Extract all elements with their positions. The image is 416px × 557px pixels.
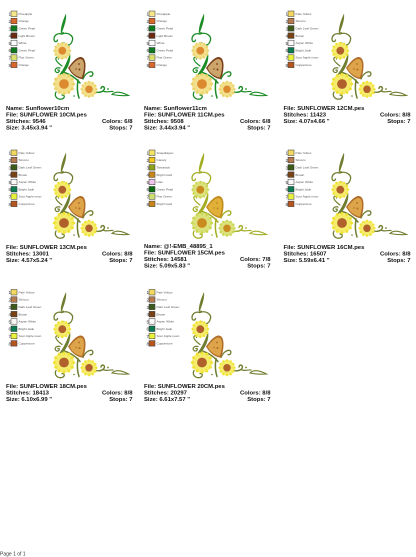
thread colour list: Tamarack <box>156 166 170 170</box>
thread colour list: 4 <box>146 312 150 317</box>
thread colour list: Pale Yellow <box>296 151 312 155</box>
design details: Name: Sunflower11cm <box>144 106 207 112</box>
thread colour list: Bright Jade <box>18 327 34 331</box>
thread colour list: 3 <box>146 305 150 310</box>
thread colour list: Orange <box>18 63 29 67</box>
thread colour list: 1 <box>286 12 288 17</box>
sunflower and butterfly motif <box>331 152 406 238</box>
thread colour list: Coppertone <box>18 202 35 206</box>
thread colour list: 4 <box>286 34 288 39</box>
thread colour list: 8 <box>8 341 12 346</box>
thread colour list: 5 <box>8 319 12 324</box>
thread colour list <box>286 150 319 207</box>
thread colour list <box>146 290 180 346</box>
thread colour list: Aspen White <box>296 41 313 45</box>
thread colour list: Bright Jade <box>18 187 34 191</box>
thread colour list: 4 <box>8 173 12 178</box>
thread colour list: 2 <box>286 158 288 163</box>
design details: Size: 3.45x3.94 " <box>6 126 52 132</box>
thread colour list: 3 <box>146 165 150 170</box>
thread colour list: 4 <box>8 312 12 317</box>
design details: File: SUNFLOWER 15CM.pes <box>144 250 226 256</box>
thread colour list: Green Pearl <box>156 48 173 52</box>
thread colour list: Aspen White <box>18 180 36 184</box>
thread colour list: 6 <box>8 327 12 332</box>
design card: Sunflower10cm <box>6 11 133 132</box>
thread colour list: 4 <box>146 173 150 178</box>
thread colour list: Green Pearl <box>18 48 35 52</box>
thread colour list <box>146 11 173 68</box>
thread colour list: Sour Apple neon <box>296 195 319 199</box>
design details: File: SUNFLOWER 16CM.pes <box>284 245 365 251</box>
design details <box>284 106 411 125</box>
design details <box>284 245 411 264</box>
thread colour list: 6 <box>8 187 12 192</box>
design details: Stitches: 13001 <box>6 252 50 258</box>
thread colour list: Dark Leaf Green <box>296 26 319 30</box>
thread colour list: 5 <box>146 41 150 46</box>
thread colour list: 8 <box>8 63 12 68</box>
design details: Stops: 7 <box>109 397 133 403</box>
thread colour list: 6 <box>146 327 150 332</box>
thread colour list: Flax Green <box>156 56 172 60</box>
design details: Stops: 7 <box>387 258 411 264</box>
design details: Stops: 7 <box>109 126 133 132</box>
thread colour list: Dark Leaf Green <box>18 305 42 309</box>
thread colour list: Sour Apple neon <box>156 334 180 338</box>
thread colour list: Sirocco <box>18 298 29 302</box>
thread colour list: 7 <box>146 194 150 200</box>
thread colour list: Pale Yellow <box>296 12 312 16</box>
design card: Sunflower11cm <box>144 11 271 132</box>
thread colour list: Canary <box>156 158 167 162</box>
thread colour list: 1 <box>146 290 150 295</box>
design details: Colors: 7/8 <box>240 257 271 263</box>
design details: Size: 5.09x5.83 " <box>144 264 190 270</box>
thread colour list <box>146 150 174 207</box>
thread colour list: 7 <box>146 334 150 339</box>
thread colour list: Bright Gold <box>156 202 172 206</box>
design details <box>144 384 271 403</box>
design details: Name: @!-EMB_48895_1 <box>144 244 213 250</box>
thread colour list: 1 <box>8 151 12 156</box>
design card: SUNFLOWER 16CM <box>284 150 411 264</box>
design details: Colors: 6/8 <box>240 119 271 125</box>
thread colour list: 2 <box>286 19 288 24</box>
thread colour list: 1 <box>8 12 12 17</box>
design details: Stops: 7 <box>109 258 133 264</box>
thread colour list: 2 <box>146 298 150 302</box>
thread colour list <box>8 11 35 68</box>
thread colour list: 5 <box>8 41 12 46</box>
sunflower and butterfly motif <box>53 292 128 378</box>
thread colour list: Snapdragon <box>156 151 174 155</box>
design details: File: SUNFLOWER 20CM.pes <box>144 384 226 390</box>
sunflower and butterfly motif <box>191 152 266 238</box>
design card: SUNFLOWER 13CM <box>6 150 133 264</box>
design details: Colors: 8/8 <box>380 252 411 258</box>
design card: @!-EMB_48895_1 <box>144 150 271 270</box>
design details: Stops: 7 <box>247 126 271 132</box>
thread colour list: Pale Yellow <box>156 290 173 294</box>
design card: SUNFLOWER 20CM <box>144 290 271 403</box>
thread colour list <box>286 11 319 68</box>
thread colour list: Aspen White <box>156 320 174 324</box>
thread colour list: 1 <box>286 151 288 156</box>
thread colour list: Brown <box>18 312 28 316</box>
design details: Colors: 6/8 <box>102 119 133 125</box>
design details: Stitches: 9508 <box>144 119 184 125</box>
thread colour list: White <box>18 41 27 45</box>
thread colour list: Pale Yellow <box>18 290 35 294</box>
thread colour list: Bright Gold <box>156 173 172 177</box>
thread colour list: 5 <box>146 180 150 185</box>
thread colour list: White <box>156 41 165 45</box>
design details: Colors: 8/8 <box>240 390 271 396</box>
thread colour list: 6 <box>146 187 150 192</box>
thread colour list: Flax Green <box>18 56 34 60</box>
thread colour list: Green Pearl <box>156 187 173 191</box>
thread colour list: Dark Leaf Green <box>296 166 319 170</box>
thread colour list: Green Pearl <box>156 26 173 30</box>
thread colour list: 7 <box>146 56 150 60</box>
thread colour list: Pineapple <box>156 12 171 16</box>
thread colour list: 3 <box>286 165 288 170</box>
thread colour list: Sirocco <box>156 298 167 302</box>
thread colour list: 2 <box>8 158 12 163</box>
sunflower and butterfly motif <box>53 152 128 238</box>
thread colour list: Coppertone <box>296 202 312 206</box>
thread colour list: Aspen White <box>296 180 313 184</box>
thread colour list: 4 <box>146 34 150 39</box>
sunflower and butterfly motif <box>191 292 266 378</box>
thread colour list: 3 <box>286 26 288 31</box>
thread colour list: 2 <box>146 158 150 163</box>
design details: Size: 5.59x6.41 " <box>284 258 330 264</box>
thread colour list: Brown <box>156 312 166 316</box>
thread colour list: 8 <box>146 341 150 346</box>
thread colour list: 2 <box>8 19 12 24</box>
thread colour list: 8 <box>8 202 12 207</box>
thread colour list: Sirocco <box>296 158 306 162</box>
thread colour list: 7 <box>286 56 288 60</box>
thread colour list: Orange <box>18 19 29 23</box>
thread colour list: Green Pearl <box>18 26 35 30</box>
thread colour list: Light Brown <box>156 34 173 38</box>
design details: Stops: 7 <box>247 397 271 403</box>
design card: SUNFLOWER 18CM <box>6 290 133 403</box>
thread colour list: Orange <box>156 63 167 67</box>
thread colour list: Lilac <box>156 180 163 184</box>
design details: Stitches: 18413 <box>6 390 50 396</box>
design details: File: SUNFLOWER 18CM.pes <box>6 384 88 390</box>
thread colour list: 8 <box>146 63 150 68</box>
design details: Size: 6.61x7.57 " <box>144 397 190 403</box>
design details: Colors: 8/8 <box>102 252 133 258</box>
thread colour list: Bright Jade <box>296 48 311 52</box>
design details: File: SUNFLOWER 11CM.pes <box>144 112 225 118</box>
design details: Size: 6.10x6.99 " <box>6 397 52 403</box>
design details: Colors: 8/8 <box>380 112 411 118</box>
design details <box>6 384 133 403</box>
design details: File: SUNFLOWER 12CM.pes <box>284 106 365 112</box>
design details <box>6 106 133 132</box>
thread colour list: Brown <box>296 34 305 38</box>
thread colour list: Sour Apple neon <box>296 56 319 60</box>
design details: Stitches: 20297 <box>144 390 188 396</box>
design details <box>144 106 271 132</box>
thread colour list: Sirocco <box>296 19 306 23</box>
design details: Stitches: 16507 <box>284 252 327 258</box>
thread colour list: 1 <box>8 290 12 295</box>
thread colour list: 6 <box>286 187 288 192</box>
design details: Colors: 8/8 <box>102 390 133 396</box>
thread colour list: Sour Apple neon <box>18 334 42 338</box>
thread colour list: Coppertone <box>156 342 173 346</box>
thread colour list: 5 <box>286 41 288 46</box>
sunflower and butterfly motif <box>331 14 406 99</box>
thread colour list: Coppertone <box>18 342 35 346</box>
thread colour list: 7 <box>8 56 12 60</box>
thread colour list: 5 <box>286 180 288 185</box>
thread colour list: Brown <box>18 173 28 177</box>
design details: File: SUNFLOWER 13CM.pes <box>6 245 88 251</box>
design details: Size: 3.44x3.94 " <box>144 126 190 132</box>
thread colour list: Dark Leaf Green <box>156 305 180 309</box>
thread colour list: 3 <box>8 305 12 310</box>
thread colour list: Dark Leaf Green <box>18 166 42 170</box>
thread colour list: 6 <box>8 48 12 53</box>
design details <box>144 244 271 270</box>
thread colour list: 1 <box>146 12 150 17</box>
thread colour list: 2 <box>146 19 150 24</box>
design details: Stitches: 14581 <box>144 257 188 263</box>
design details: Stops: 7 <box>387 119 411 125</box>
thread colour list <box>8 150 42 207</box>
thread colour list: Light Brown <box>18 34 35 38</box>
design details <box>6 245 133 264</box>
thread colour list: 4 <box>286 173 288 178</box>
thread colour list: 6 <box>286 48 288 53</box>
design details: Size: 4.07x4.66 " <box>284 119 330 125</box>
design card: SUNFLOWER 12CM <box>284 11 411 125</box>
thread colour list: Pineapple <box>18 12 33 16</box>
thread colour list: Coppertone <box>296 63 312 67</box>
thread colour list: Bright Jade <box>296 187 311 191</box>
design details: Size: 4.57x5.24 " <box>6 258 52 264</box>
thread colour list: Flax Green <box>156 195 172 199</box>
design details: Name: Sunflower10cm <box>6 106 69 112</box>
thread colour list: 4 <box>8 34 12 39</box>
design details: File: SUNFLOWER 10CM.pes <box>6 112 88 118</box>
thread colour list: Sirocco <box>18 158 29 162</box>
thread colour list: Sour Apple neon <box>18 195 42 199</box>
thread colour list: 8 <box>146 202 150 207</box>
design details: Stitches: 11423 <box>284 112 327 118</box>
thread colour list: 5 <box>146 319 150 324</box>
thread colour list: 6 <box>146 48 150 53</box>
thread colour list: Pale Yellow <box>18 151 35 155</box>
thread colour list: 2 <box>8 298 12 302</box>
design details: Stops: 7 <box>247 264 271 270</box>
thread colour list: 1 <box>146 151 150 156</box>
sunflower and butterfly motif <box>53 14 128 99</box>
thread colour list: 7 <box>286 194 288 200</box>
thread colour list: Aspen White <box>18 320 36 324</box>
thread colour list <box>8 290 42 346</box>
thread colour list: Orange <box>156 19 167 23</box>
design details: Stitches: 9546 <box>6 119 46 125</box>
thread colour list: 7 <box>8 334 12 339</box>
thread colour list: 8 <box>286 202 288 207</box>
thread colour list: 8 <box>286 63 288 68</box>
thread colour list: 7 <box>8 194 12 200</box>
thread colour list: 3 <box>8 26 12 31</box>
thread colour list: 3 <box>146 26 150 31</box>
sunflower and butterfly motif <box>191 14 266 99</box>
thread colour list: Bright Jade <box>156 327 172 331</box>
thread colour list: Brown <box>296 173 305 177</box>
thread colour list: 3 <box>8 165 12 170</box>
thread colour list: 5 <box>8 180 12 185</box>
